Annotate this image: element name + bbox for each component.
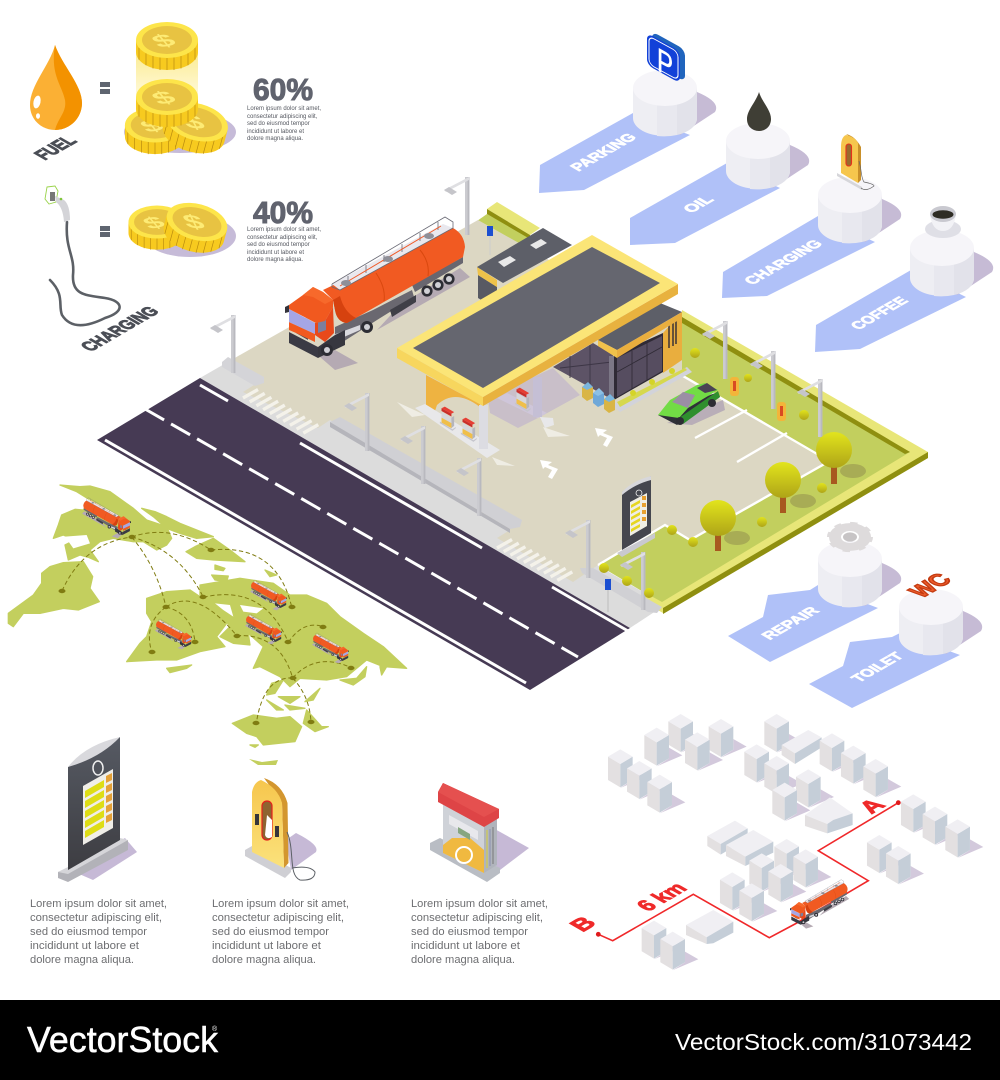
icon: oil drop <box>747 92 771 131</box>
text block: sed do eiusmod tempor <box>411 926 528 938</box>
icon: parking sign <box>647 32 685 86</box>
sidewalk <box>200 355 665 628</box>
pedestal: repair <box>818 541 901 607</box>
icon: fuel drop <box>30 45 82 130</box>
watermark url: VectorStock.com/31073442 <box>675 1029 972 1055</box>
icon: parking sign: P <box>657 40 673 86</box>
canopy arch <box>426 375 480 417</box>
route line <box>598 803 898 941</box>
delivery truck <box>790 880 849 929</box>
lamp: front 2 <box>400 426 425 484</box>
label: parking: PARKING <box>567 131 641 174</box>
small sign <box>605 579 611 612</box>
label: coffee: COFFEE <box>847 295 912 332</box>
panel: fuel cost <box>30 22 323 163</box>
text block: fuel description: sed do eiusmod tempor <box>247 121 310 127</box>
truck on map: asia <box>312 633 349 663</box>
routes <box>62 532 351 723</box>
crosswalks <box>243 390 572 580</box>
truck on map: middle east <box>245 614 282 644</box>
pedestal: oil <box>726 123 809 189</box>
text block: Lorem ipsum dolor sit amet, <box>411 898 548 910</box>
equals sign <box>100 226 110 237</box>
panel: service repair <box>728 524 901 662</box>
road and ground plan <box>97 202 928 690</box>
text block: charging description: consectetur adipiscing elit, <box>247 235 318 241</box>
text block: fuel description: dolore magna aliqua. <box>247 136 303 142</box>
pedestal: toilet <box>899 589 982 655</box>
car <box>658 383 725 425</box>
label: point B: B <box>564 913 603 935</box>
icon: coin stack <box>124 22 236 160</box>
panel: service coffee <box>815 206 993 352</box>
icon: price totem <box>58 737 137 882</box>
lawn <box>598 320 910 602</box>
icon: fuel dispenser <box>430 783 529 882</box>
canopy column <box>479 405 488 449</box>
route nodes <box>58 535 354 725</box>
panel: price sign <box>30 737 170 966</box>
rear pump island <box>497 377 554 428</box>
map inland seas <box>65 535 263 617</box>
icon: wc letters: WC <box>903 570 958 602</box>
city blocks <box>608 714 983 970</box>
panel: service parking <box>539 32 716 193</box>
continents <box>8 485 407 747</box>
text block: incididunt ut labore et <box>30 940 139 952</box>
panel: fuel dispenser <box>411 783 551 966</box>
antarctica strip <box>249 759 278 765</box>
dispenser: front left <box>440 407 456 431</box>
text block: dolore magna aliqua. <box>30 954 134 966</box>
back roof <box>477 228 572 310</box>
watermark logo: VectorStock <box>27 1019 219 1060</box>
lamp: lot 1 <box>702 321 727 379</box>
truck on map: europe <box>250 580 287 610</box>
label: charging: CHARGING <box>77 304 164 355</box>
bushes <box>599 348 827 598</box>
label: distance: 6 km <box>631 879 692 915</box>
dispenser: rear <box>515 388 531 412</box>
text block: Lorem ipsum dolor sit amet, <box>212 898 349 910</box>
text block: Lorem ipsum dolor sit amet, <box>30 898 167 910</box>
road markings <box>105 385 628 683</box>
icon: gear <box>830 524 870 550</box>
lamp: corner 1 <box>565 520 590 578</box>
arrow: toilet <box>809 633 960 708</box>
label: point A: A <box>853 795 892 817</box>
icon: two coins <box>128 197 236 259</box>
text block: incididunt ut labore et <box>212 940 321 952</box>
shop building <box>553 303 692 412</box>
parking lines <box>598 376 828 565</box>
pedestal: coffee <box>910 230 993 296</box>
label: fuel: FUEL <box>30 133 82 163</box>
label: charging service: CHARGING <box>741 238 827 287</box>
price sign on lot <box>617 476 655 557</box>
canopy <box>397 235 678 406</box>
truck on map: america <box>82 498 131 538</box>
upper lawn corner <box>457 202 540 265</box>
text block: fuel description: consectetur adipiscing elit, <box>247 114 318 120</box>
footer bar <box>0 1000 1000 1080</box>
truck on map: africa <box>155 619 192 649</box>
icon: charging plug and cable <box>45 186 120 325</box>
panel: route map <box>564 714 983 970</box>
lamp: corner 2 <box>620 552 645 610</box>
panel: service toilet <box>809 570 982 708</box>
text block: fuel description: Lorem ipsum dolor sit amet, <box>247 106 321 112</box>
lamp: lot 3 <box>797 379 822 437</box>
lamp: left block <box>222 357 264 386</box>
lamp: lot 2 <box>750 351 775 409</box>
chargers on lawn <box>730 377 786 421</box>
gas station <box>397 228 692 458</box>
registered mark: ® <box>212 1025 218 1033</box>
front pump island <box>415 404 500 458</box>
route points <box>596 800 901 937</box>
panel: service oil <box>630 92 809 245</box>
panel: charging cost <box>45 186 323 355</box>
yellow border of lot <box>640 310 928 613</box>
text block: charging description: Lorem ipsum dolor sit amet, <box>247 227 321 233</box>
panel: charger <box>212 778 352 966</box>
icon: charger <box>837 134 874 190</box>
label: toilet: TOILET <box>848 650 908 685</box>
icon: coffee cup <box>925 206 961 238</box>
arrow: coffee <box>815 270 966 352</box>
concrete forecourt <box>225 220 850 582</box>
world map <box>8 485 407 765</box>
trees and bushes <box>599 348 866 598</box>
text block: dolore magna aliqua. <box>212 954 316 966</box>
curb right <box>580 568 662 613</box>
lamp: far <box>444 177 469 235</box>
arrow: oil <box>630 163 780 245</box>
tree 1 <box>700 500 750 551</box>
icon: charging post <box>245 778 317 880</box>
lamp: front 1 <box>344 393 369 451</box>
label: repair: REPAIR <box>758 605 823 642</box>
dispenser: front right <box>461 418 477 442</box>
panel: service charging <box>722 134 901 298</box>
text block: sed do eiusmod tempor <box>30 926 147 938</box>
text block: fuel description: incididunt ut labore et <box>247 129 304 135</box>
pedestal: parking <box>633 70 716 136</box>
lamp: left <box>210 315 235 373</box>
arrow: parking <box>539 113 690 193</box>
text block: charging description: dolore magna aliqua. <box>247 257 303 263</box>
value: 60 percent: 60% <box>253 72 313 107</box>
arrow: charging <box>722 216 875 298</box>
pedestal: charging <box>818 177 901 243</box>
text block: consectetur adipiscing elit, <box>30 912 162 924</box>
label: oil: OIL <box>680 193 718 216</box>
parking sign small <box>487 226 493 255</box>
curbs and street lamps <box>330 321 822 613</box>
value: 40 percent: 40% <box>253 195 313 230</box>
tree 3 <box>816 432 866 484</box>
equals sign <box>100 82 110 94</box>
text block: sed do eiusmod tempor <box>212 926 329 938</box>
ground arrows <box>397 402 613 479</box>
canopy shadow <box>488 368 580 428</box>
tree 2 <box>765 462 816 513</box>
road <box>97 378 630 690</box>
arrow: repair <box>728 585 878 662</box>
text block: consectetur adipiscing elit, <box>411 912 543 924</box>
text block: dolore magna aliqua. <box>411 954 515 966</box>
text block: consectetur adipiscing elit, <box>212 912 344 924</box>
tanker truck <box>285 217 470 370</box>
curb front <box>330 417 522 529</box>
lamp: front 3 <box>456 458 481 516</box>
truck and lamps behind station <box>210 177 493 386</box>
text block: charging description: sed do eiusmod tempor <box>247 242 310 248</box>
text block: incididunt ut labore et <box>411 940 520 952</box>
bins <box>582 382 615 413</box>
text block: charging description: incididunt ut labore et <box>247 250 304 256</box>
